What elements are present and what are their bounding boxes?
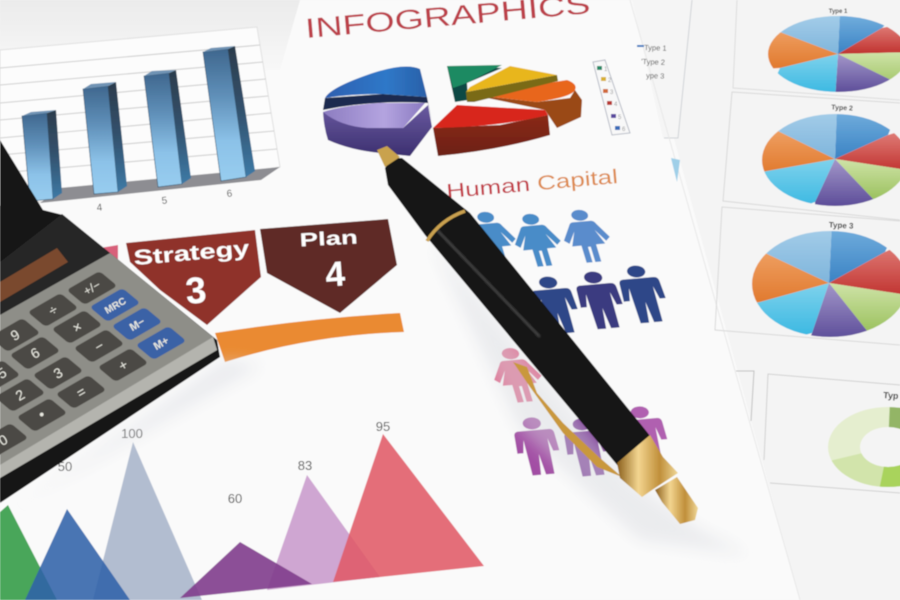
calculator keys: 9 bbox=[8, 326, 23, 344]
calculator keys: ÷ bbox=[46, 301, 61, 319]
pie legend bbox=[593, 60, 630, 135]
small empty frame bbox=[736, 371, 754, 421]
pie legend: 1 bbox=[604, 67, 608, 73]
step shape: strategy 3: Strategy bbox=[133, 237, 251, 270]
calculator hinge and body bbox=[0, 140, 220, 503]
triangle value labels: 60 bbox=[228, 491, 242, 506]
pie legend: 6 bbox=[622, 127, 626, 133]
calculator keys: × bbox=[69, 318, 85, 336]
pen barrel bbox=[385, 158, 650, 466]
type legend on back page bbox=[637, 43, 667, 81]
donut chart: Type 4: Typ bbox=[883, 390, 899, 401]
pie chart: Type 2: Type 2 bbox=[831, 104, 853, 113]
pie chart: Type 2 bbox=[723, 92, 900, 220]
bar 4 bbox=[83, 82, 127, 194]
purple slice bbox=[323, 103, 432, 156]
pie legend: 5 bbox=[618, 115, 622, 121]
calculator face bbox=[0, 253, 217, 478]
purple men bbox=[509, 405, 673, 477]
type legend on back page: ype 3 bbox=[646, 71, 665, 81]
pie chart: Type 1 bbox=[733, 0, 900, 100]
type legend on back page: Type 1 bbox=[644, 43, 667, 53]
bar 3 bbox=[22, 110, 62, 201]
calculator keys: • bbox=[35, 406, 48, 422]
orange slice bbox=[473, 80, 582, 128]
calculator keys: 6 bbox=[28, 344, 43, 362]
pen ring bbox=[427, 211, 465, 241]
axis labels bbox=[96, 188, 233, 214]
chart grid bbox=[0, 27, 280, 205]
calculator keys: M− bbox=[128, 316, 147, 334]
triangle chart bbox=[0, 419, 484, 600]
yellow slice bbox=[466, 66, 558, 102]
pie legend: 2 bbox=[608, 78, 612, 84]
solar panel bbox=[0, 248, 68, 302]
pie legend: 3 bbox=[610, 90, 614, 96]
pie chart: Type 3: Type 3 bbox=[829, 220, 854, 231]
step shape: plan 4: Plan bbox=[299, 228, 358, 252]
calculator keys: M+ bbox=[152, 335, 171, 353]
bar chart bbox=[0, 27, 280, 214]
pie chart: Type 3 bbox=[715, 207, 900, 350]
axis labels: 6 bbox=[226, 188, 233, 200]
red slice bbox=[433, 105, 550, 156]
green slice bbox=[447, 65, 502, 102]
people pictograms bbox=[461, 208, 673, 477]
calculator keys: = bbox=[73, 383, 89, 401]
bar 6 bbox=[203, 46, 255, 181]
3D exploded pie chart bbox=[323, 65, 582, 156]
calculator display housing bbox=[0, 214, 110, 315]
type legend on back page: 'Type 2 bbox=[641, 57, 665, 67]
pen gold cone bbox=[617, 435, 678, 497]
orange swoosh band bbox=[215, 313, 404, 362]
pen bbox=[377, 146, 698, 524]
pen shadow bbox=[430, 240, 750, 555]
pie legend: 4 bbox=[614, 102, 618, 108]
pen nib bbox=[655, 477, 698, 524]
step shape: plan 4: 4 bbox=[324, 254, 347, 295]
axis labels: 4 bbox=[96, 202, 103, 214]
pie chart: Type 1: Type 1 bbox=[829, 9, 848, 15]
calculator keys: +/− bbox=[81, 278, 103, 298]
step shape: strategy 3: 3 bbox=[184, 269, 208, 312]
triangle value labels: 95 bbox=[376, 419, 390, 434]
calculator keys: 3 bbox=[51, 364, 66, 382]
pen clip bbox=[513, 362, 622, 477]
calculator shadow bbox=[20, 360, 262, 505]
bar 5 bbox=[144, 70, 191, 187]
pen top cap bbox=[377, 146, 400, 167]
calculator keys: MRC bbox=[103, 296, 128, 317]
calculator bbox=[0, 140, 220, 503]
men row bbox=[525, 264, 673, 335]
calculator keys: 2 bbox=[13, 386, 28, 404]
pink woman bbox=[485, 346, 549, 404]
step shape: plan 4 bbox=[260, 219, 397, 313]
blue slice bbox=[323, 67, 432, 122]
step shape: strategy 3 bbox=[100, 230, 261, 325]
axis labels: 5 bbox=[161, 195, 168, 207]
calculator keys: + bbox=[115, 356, 131, 374]
triangle value labels: 100 bbox=[121, 426, 143, 441]
triangle value labels: 50 bbox=[58, 459, 72, 474]
donut chart: Type 4 bbox=[764, 374, 900, 495]
women row bbox=[461, 208, 617, 268]
triangle value labels bbox=[58, 419, 390, 506]
calculator keys: − bbox=[91, 337, 107, 355]
triangle value labels: 83 bbox=[298, 458, 312, 473]
human capital heading: Human Capital bbox=[446, 166, 619, 203]
chart floor bbox=[40, 167, 280, 203]
calculator keys bbox=[0, 267, 186, 461]
